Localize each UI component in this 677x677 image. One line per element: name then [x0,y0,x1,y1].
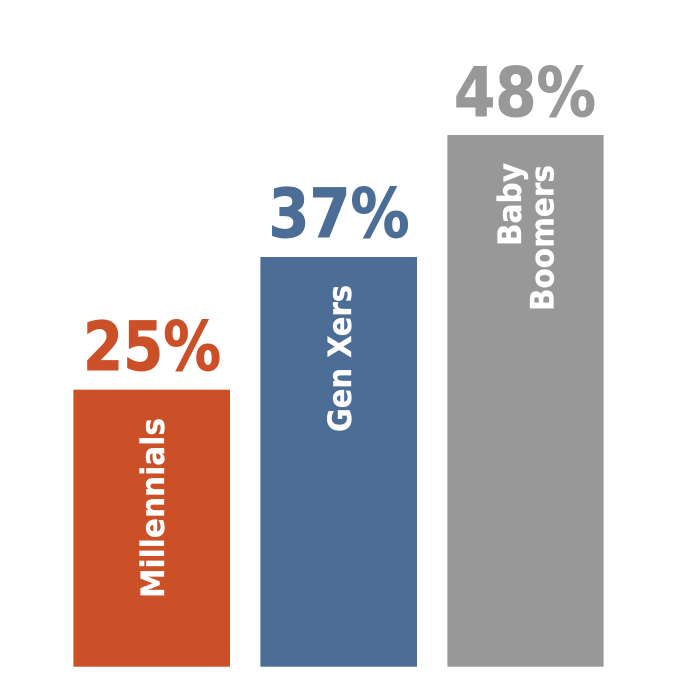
bar: Millennials [73,308,230,667]
bar: Baby Boomers [447,54,604,667]
value label: Gen Xers 37%: 37% [268,175,410,254]
bar label: Millennials: Millennials [134,418,172,598]
bar label: Baby: Baby [491,163,529,246]
bar: Gen Xers [260,175,417,667]
value label: Baby Boomers 48%: 48% [454,54,596,133]
bar label: Gen Xers: Gen Xers [321,285,359,432]
value label: Millennials 25%: 25% [83,308,221,387]
bar label: Boomers: Boomers [524,165,562,311]
